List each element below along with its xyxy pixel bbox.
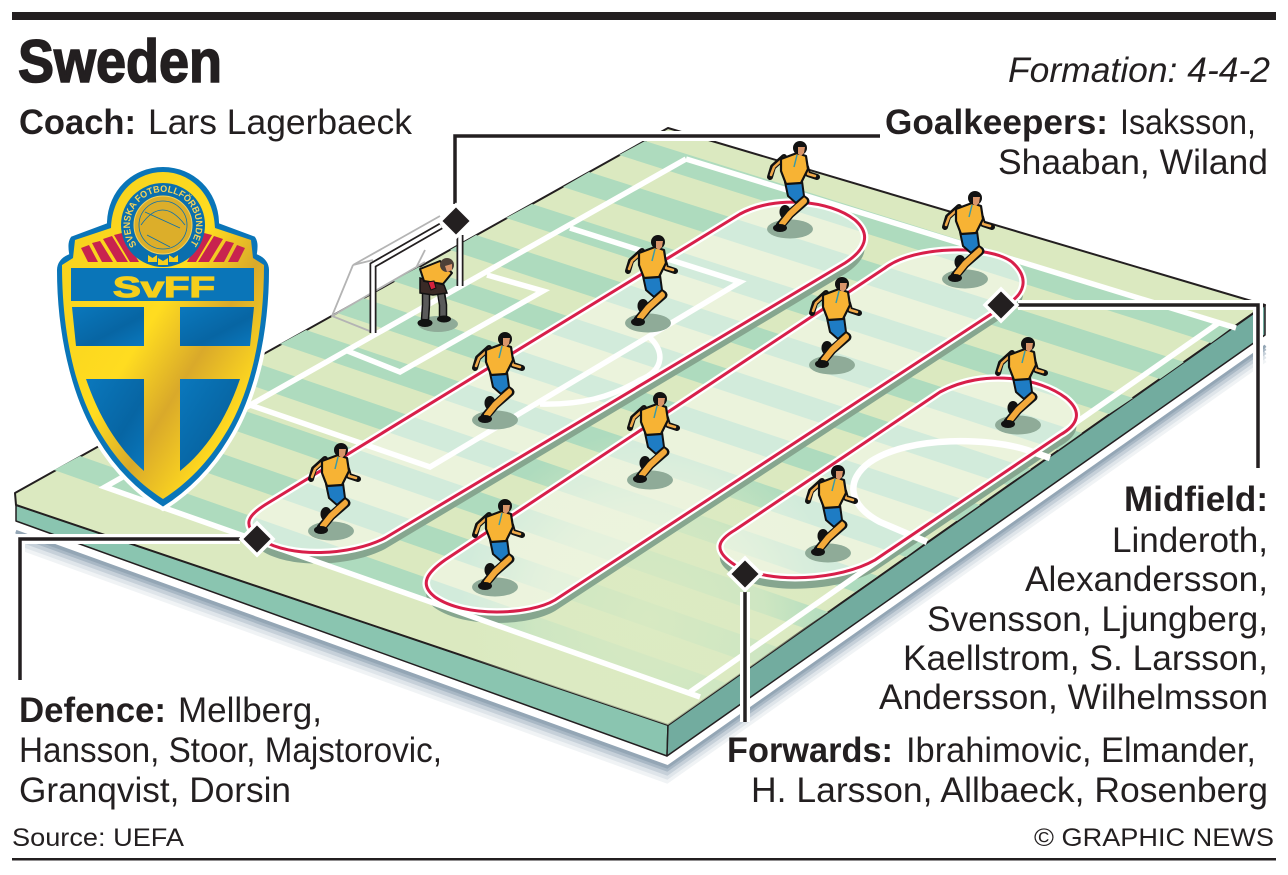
stripe fade [468,464,835,725]
player [805,465,855,562]
bottom rule [12,858,1276,860]
text: goalkeepers: Goalkeepers: [885,103,1108,142]
text: midfield [879,480,1268,717]
title: Sweden [18,28,222,95]
text: goalkeepers: Shaaban, Wiland [998,143,1268,182]
player [472,332,522,430]
text: defence: Defence: [19,691,166,730]
icon: Swedish FA crest [57,167,269,512]
crest roundel [121,183,205,267]
text: forwards: Forwards: [727,731,893,770]
pitch surface [15,128,1265,725]
pitch markings [105,159,1236,697]
crest gold inner [62,172,264,499]
player [627,392,677,490]
goalkeeper [418,258,458,332]
goal net [332,216,440,332]
text: midfield: Kaellstrom, S. Larsson, [903,639,1268,678]
panel: midfield zone [426,250,1023,612]
platform left side [16,505,668,756]
platform right side [667,305,1265,756]
text: defence: Mellberg, [178,691,322,730]
text: defence [19,691,442,810]
text: midfield: Alexandersson, [1025,560,1268,599]
panel shadows [263,250,1076,623]
panel: forwards zone [720,378,1076,578]
crest banner text: SvFF [113,272,215,304]
player [472,499,522,596]
formation label: Formation: 4-4-2 [1008,51,1270,90]
text: forwards: Ibrahimovic, Elmander, [906,731,1256,770]
text: defence: Granqvist, Dorsin [19,771,291,810]
text: goalkeepers: Isaksson, [1120,103,1256,142]
leader: goalkeepers [440,136,880,237]
text: midfield: Svensson, Ljungberg, [927,600,1268,639]
text: forwards [727,731,1268,810]
panel: defence zone [249,202,865,553]
crest crowns [148,255,178,265]
crest banner [71,268,254,301]
crest red stripes [81,233,245,262]
text: forwards: H. Larsson, Allbaeck, Rosenberg [751,771,1268,810]
text: midfield: Midfield: [1124,480,1268,519]
coach: Lars Lagerbaeck [148,103,412,142]
text: goalkeepers [885,103,1268,182]
platform drop shadow [16,339,1265,781]
player [995,337,1045,434]
player [767,141,817,238]
leader: forwards [729,558,761,722]
source: Source: UEFA [12,824,184,852]
coach: Coach: [19,103,136,142]
text: midfield: Andersson, Wilhelmsson [879,678,1268,717]
player [809,277,859,374]
player [625,235,675,332]
top rule [12,12,1276,20]
text: midfield: Linderoth, [1112,521,1268,560]
goal frame [373,226,460,333]
player [308,443,358,540]
pitch platform [15,128,1265,810]
goal [332,216,460,333]
pitch stripes [54,141,1234,699]
credit: © GRAPHIC NEWS [1034,824,1274,852]
leader: midfield [985,289,1258,468]
crest outer shield [55,165,271,509]
text: defence: Hansson, Stoor, Majstorovic, [19,731,442,770]
leader: defence [20,523,273,680]
player [942,191,992,288]
crest quarters [72,307,254,471]
crest ring text: SVENSKA FOTBOLLFÖRBUNDET [123,185,203,248]
coach [19,103,412,142]
